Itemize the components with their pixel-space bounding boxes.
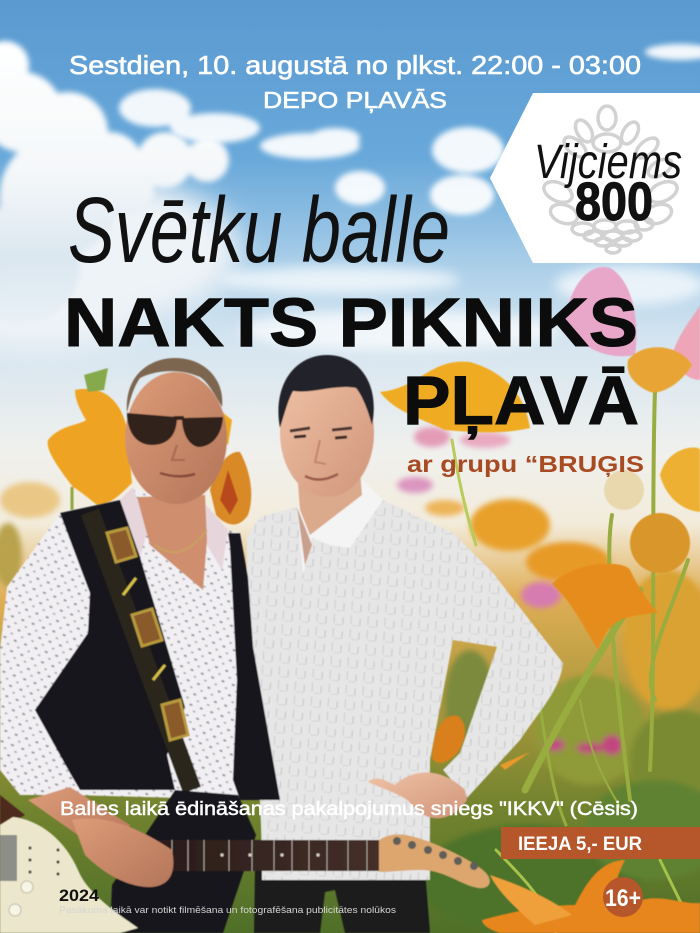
icon: pine cone bbox=[541, 106, 680, 253]
blurred meadow flowers bbox=[0, 427, 700, 933]
dark trousers left singer bbox=[110, 790, 256, 933]
black vest bbox=[35, 500, 185, 790]
event date line: Sestdien, 10. augustā no plkst. 22:00 - 03:00 bbox=[69, 50, 641, 80]
main title: NAKTS PIKNIKS bbox=[64, 284, 638, 361]
clouds bbox=[0, 41, 700, 350]
stems bbox=[452, 390, 688, 933]
script title: Svētku balle bbox=[68, 178, 450, 282]
large orange flower bottom right bbox=[482, 860, 700, 933]
logo script word: Vijciems bbox=[534, 135, 682, 189]
singer right: head bbox=[278, 355, 374, 535]
main title second line: PĻAVĀ bbox=[403, 362, 639, 440]
sunglasses bbox=[127, 413, 223, 447]
entry price bar bbox=[501, 827, 700, 859]
forearm bbox=[28, 787, 130, 860]
logo number: 800 bbox=[575, 172, 653, 232]
year: 2024 bbox=[59, 886, 100, 905]
venue line: DEPO PĻAVĀS bbox=[263, 87, 447, 113]
pink cosmos flower bbox=[565, 267, 700, 380]
band photo: two singers with guitar bbox=[0, 355, 563, 933]
right flowers bbox=[380, 347, 700, 770]
guitar strap bbox=[90, 512, 192, 790]
band subtitle: ar grupu “BRUĢIS bbox=[407, 451, 644, 477]
entry price bar: IEEJA 5,- EUR bbox=[518, 834, 642, 855]
singer left: head bbox=[125, 358, 227, 504]
singer left: shirt bbox=[0, 487, 280, 860]
age limit badge bbox=[603, 877, 643, 917]
catering note: Balles laikā ēdināšanas pakalpojumus sniegs "IKKV" (Cēsis) bbox=[60, 799, 638, 820]
left yellow flower behind the singer bbox=[48, 368, 251, 524]
picking hand bbox=[72, 819, 173, 887]
filming disclaimer: Pasākuma laikā var notikt filmēšana un fotografēšana publicitātes nolūkos bbox=[59, 905, 396, 916]
neck skin bbox=[137, 495, 207, 590]
guitar bbox=[0, 795, 490, 933]
logo badge: Vijciems 800 bbox=[490, 93, 700, 263]
singer right: shirt and trousers bbox=[247, 480, 563, 933]
age limit badge: 16+ bbox=[605, 885, 641, 912]
